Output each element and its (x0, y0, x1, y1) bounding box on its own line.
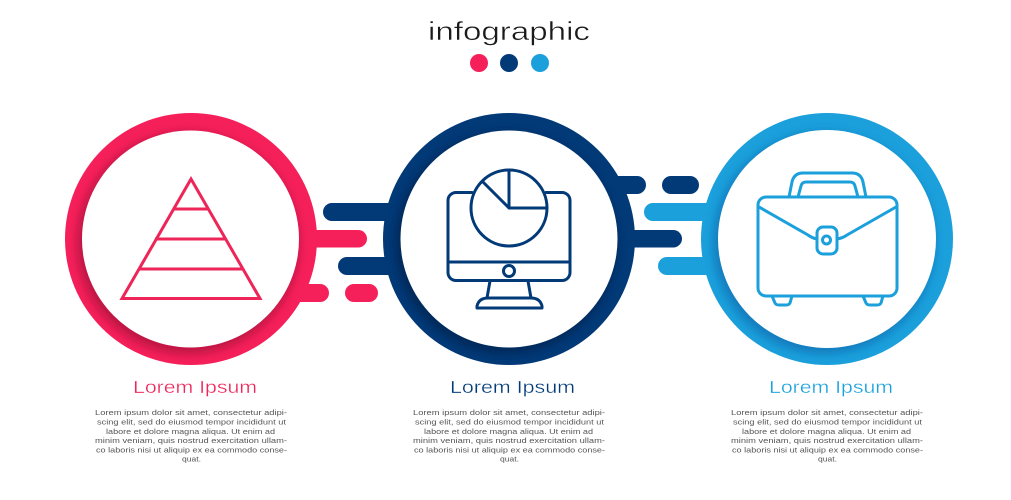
text block: navy: minim veniam, quis nostrud exercitation ullam- (413, 436, 606, 445)
icon: layered pyramid (122, 179, 260, 298)
text block: blue: labore et dolore magna aliqua. Ut enim ad (742, 427, 911, 436)
text block: navy: scing elit, sed do eiusmod tempor incididunt ut (415, 418, 604, 426)
panel: pink ring (65, 113, 317, 365)
panel: blue ring (701, 113, 953, 365)
text block: pink: co laboris nisi ut aliquip ex ea commodo conse- (96, 445, 288, 454)
text block: blue: co laboris nisi ut aliquip ex ea commodo conse- (732, 445, 924, 454)
heading: navy: Lorem Ipsum (450, 377, 575, 397)
text block: navy: labore et dolore magna aliqua. Ut enim ad (424, 427, 593, 436)
text block: pink: labore et dolore magna aliqua. Ut enim ad (106, 427, 275, 436)
text block: pink: minim veniam, quis nostrud exercitation ullam- (95, 436, 288, 445)
heading: pink: Lorem Ipsum (133, 377, 257, 397)
icon: briefcase (758, 173, 897, 305)
legend dots (470, 54, 549, 72)
text block: blue: scing elit, sed do eiusmod tempor incididunt ut (733, 418, 922, 426)
title: infographic (428, 16, 590, 46)
connector bars: pink and navy (280, 203, 403, 302)
text block: navy: quat. (500, 454, 519, 464)
panel: navy ring (383, 113, 635, 365)
text block: blue: Lorem ipsum dolor sit amet, consectetur adipi- (731, 408, 924, 417)
text block: pink: Lorem ipsum dolor sit amet, consectetur adipi- (95, 408, 288, 417)
text block: pink: scing elit, sed do eiusmod tempor incididunt ut (97, 418, 286, 426)
text block: pink: quat. (182, 454, 201, 464)
text block: navy (413, 408, 606, 464)
icon: monitor with pie chart (448, 170, 570, 308)
text block: blue: quat. (818, 454, 837, 464)
connector bars: navy and blue (600, 176, 724, 275)
text block: navy: Lorem ipsum dolor sit amet, consectetur adipi- (413, 408, 606, 417)
text block: pink (95, 408, 288, 464)
text block: blue (731, 408, 924, 464)
heading: blue: Lorem Ipsum (769, 377, 893, 397)
text block: blue: minim veniam, quis nostrud exercitation ullam- (731, 436, 924, 445)
text block: navy: co laboris nisi ut aliquip ex ea commodo conse- (414, 445, 606, 454)
